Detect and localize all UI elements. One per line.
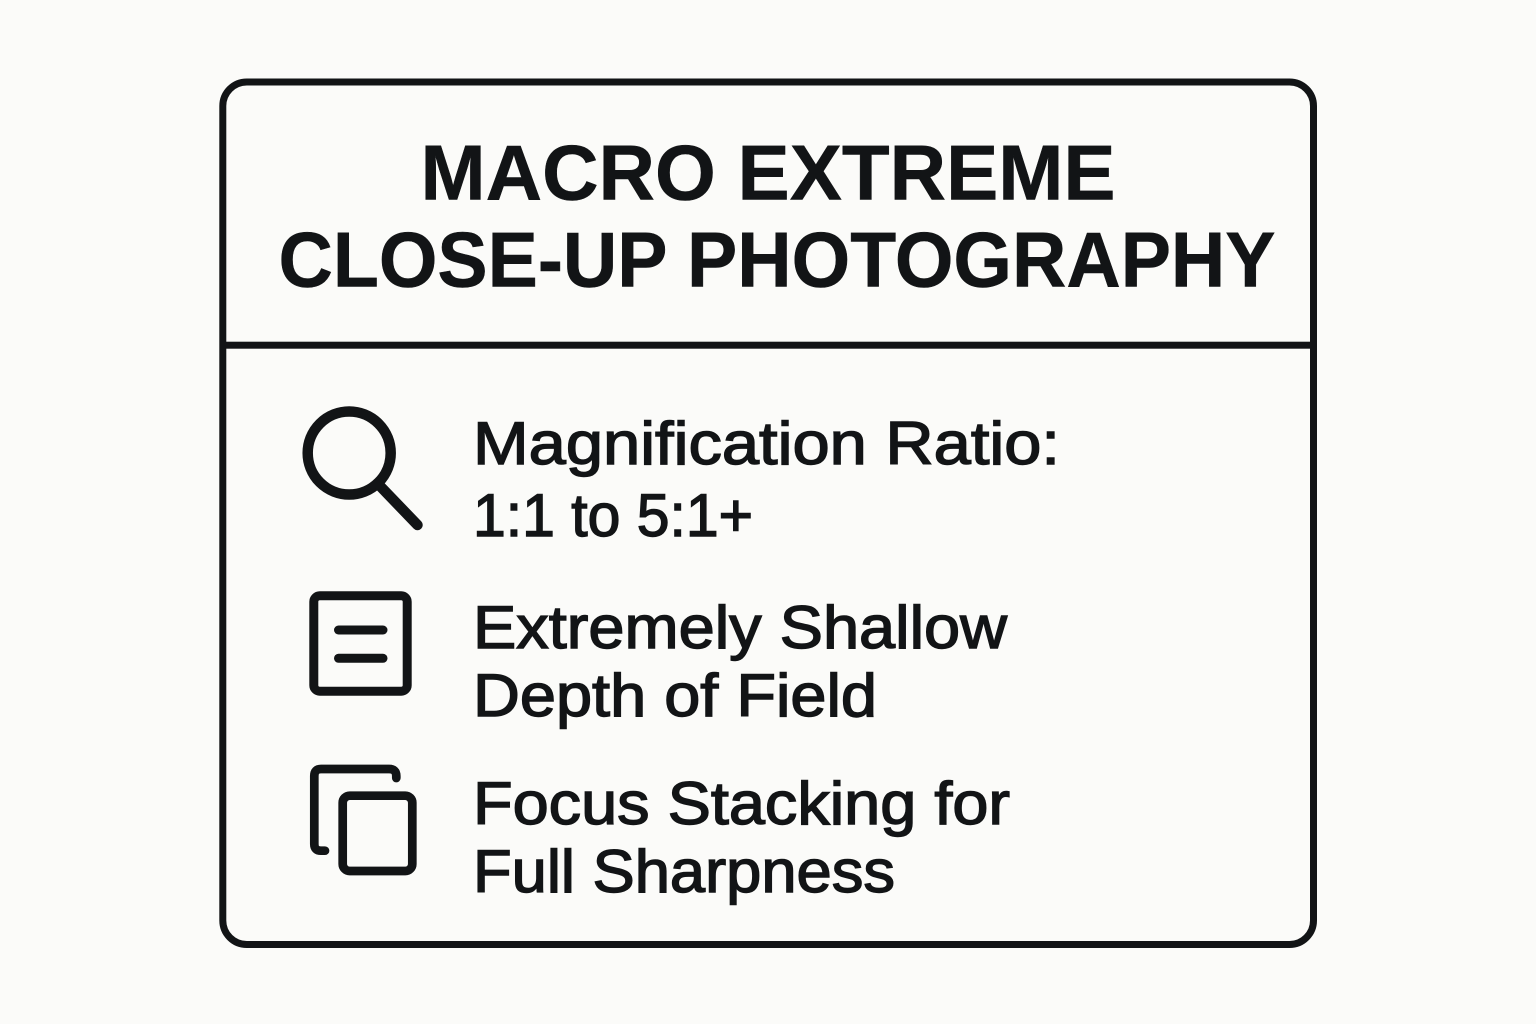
text: shallow depth of field	[473, 594, 1008, 729]
divider under title	[225, 342, 1311, 349]
text: magnification ratio: 1:1 to 5:1+	[473, 482, 753, 549]
text: focus stacking: Focus Stacking for	[473, 770, 1010, 837]
title	[278, 128, 1276, 304]
text: magnification ratio	[473, 410, 1060, 549]
text: shallow depth of field: Extremely Shallow	[473, 594, 1008, 661]
text: magnification ratio: Magnification Ratio:	[473, 410, 1060, 477]
text: focus stacking: Full Sharpness	[473, 838, 895, 905]
icon: square with lines	[314, 596, 407, 691]
title: MACRO EXTREME	[420, 128, 1116, 216]
icon: overlapping squares	[314, 769, 412, 871]
icon: magnifying glass	[308, 412, 418, 525]
text: focus stacking	[473, 770, 1010, 905]
text: shallow depth of field: Depth of Field	[473, 662, 877, 729]
title: CLOSE-UP PHOTOGRAPHY	[278, 216, 1276, 304]
panel: card frame	[223, 82, 1313, 944]
